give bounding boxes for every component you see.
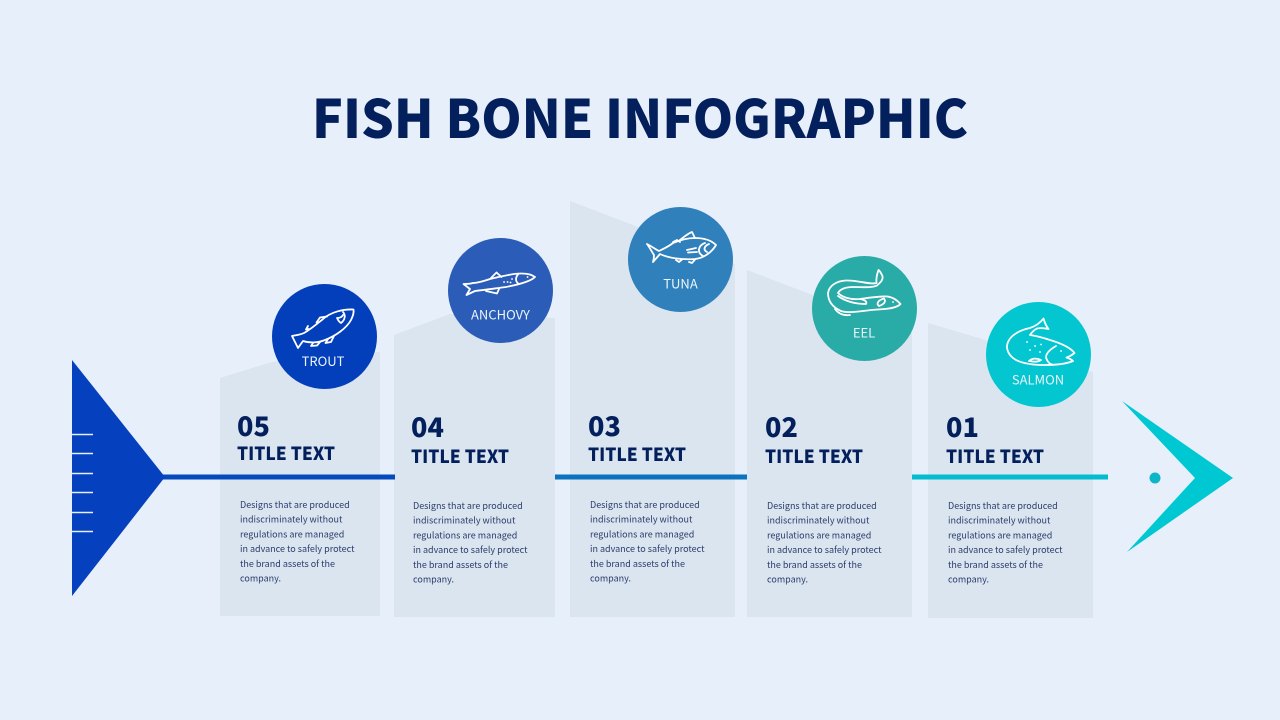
column 04 text: indiscriminately without — [413, 514, 516, 527]
panel: 03 background — [570, 201, 735, 617]
icon: eel — [828, 270, 900, 315]
column 05 text: the brand assets of the — [240, 557, 335, 570]
column 05 text: indiscriminately without — [240, 513, 343, 526]
column 05 text — [237, 405, 355, 584]
column 04 text: regulations are managed — [413, 528, 517, 541]
panel: 02 background — [747, 270, 912, 617]
column 02 text: Designs that are produced — [767, 499, 877, 512]
badge: tuna — [628, 207, 733, 312]
spine segment: across panel 03 — [555, 474, 747, 480]
column 02 text: the brand assets of the — [767, 558, 862, 571]
column 01 text: TITLE TEXT — [946, 443, 1044, 469]
panel: 04 background — [394, 314, 555, 617]
icon: salmon — [1007, 318, 1074, 365]
badge: trout: TROUT — [302, 351, 345, 370]
fish tail arrow — [1122, 401, 1233, 552]
column 02 text: regulations are managed — [767, 528, 871, 541]
badge: trout — [272, 284, 377, 389]
column 02 text: 02 — [765, 406, 798, 445]
column 04 text: the brand assets of the — [413, 558, 508, 571]
column 03 text: Designs that are produced — [590, 498, 700, 511]
column 01 text: regulations are managed — [948, 528, 1052, 541]
column 01 text: in advance to safely protect — [948, 543, 1063, 556]
column 04 text: 04 — [411, 406, 444, 445]
icon: tuna — [647, 232, 716, 263]
badge: eel: EEL — [853, 322, 875, 342]
column 03 text: the brand assets of the — [590, 557, 685, 570]
badge: eel — [812, 256, 917, 361]
column 03 text: company. — [590, 572, 631, 584]
column 02 text: indiscriminately without — [767, 514, 870, 527]
column 05 text: TITLE TEXT — [237, 440, 335, 466]
column 02 text: TITLE TEXT — [765, 443, 863, 469]
spine segment: head to panel 04 — [160, 474, 395, 480]
badge: salmon: SALMON — [1012, 370, 1064, 388]
column 04 text: TITLE TEXT — [411, 443, 509, 469]
spine segment: panel 01 to tail — [912, 474, 1108, 480]
fish head with gill lines — [72, 360, 165, 596]
badge: salmon — [986, 302, 1091, 407]
title: FISH BONE INFOGRAPHIC — [312, 78, 968, 154]
column 01 text: company. — [948, 572, 989, 586]
column 05 text: Designs that are produced — [240, 498, 350, 511]
tail dot — [1150, 472, 1160, 484]
column 03 text: indiscriminately without — [590, 513, 693, 526]
column 01 text: Designs that are produced — [948, 499, 1058, 512]
column 05 text: company. — [240, 572, 281, 584]
column 04 text — [411, 406, 528, 586]
column 02 text — [765, 406, 882, 586]
column 02 text: in advance to safely protect — [767, 543, 882, 556]
column 01 text: indiscriminately without — [948, 514, 1051, 527]
column 05 text: in advance to safely protect — [240, 542, 355, 555]
badge: tuna: TUNA — [663, 274, 698, 292]
column 05 text: regulations are managed — [240, 527, 344, 540]
panel: 01 background — [928, 323, 1093, 618]
column 05 text: 05 — [237, 405, 270, 444]
badge: anchovy: ANCHOVY — [471, 304, 530, 324]
panel: 05 background — [220, 352, 380, 616]
column 04 text: in advance to safely protect — [413, 543, 528, 556]
badge: anchovy — [448, 238, 553, 343]
icon: anchovy — [464, 272, 535, 295]
column 04 text: company. — [413, 572, 454, 586]
column 03 text: regulations are managed — [590, 527, 694, 540]
column 03 text: TITLE TEXT — [588, 441, 686, 467]
column 02 text: company. — [767, 572, 808, 586]
column 04 text: Designs that are produced — [413, 499, 523, 512]
column 03 text — [588, 405, 705, 584]
column 03 text: in advance to safely protect — [590, 542, 705, 555]
icon: trout — [292, 309, 354, 348]
column 03 text: 03 — [588, 405, 621, 444]
column 01 text — [946, 406, 1063, 586]
column 01 text: the brand assets of the — [948, 558, 1043, 571]
column 01 text: 01 — [946, 406, 979, 445]
